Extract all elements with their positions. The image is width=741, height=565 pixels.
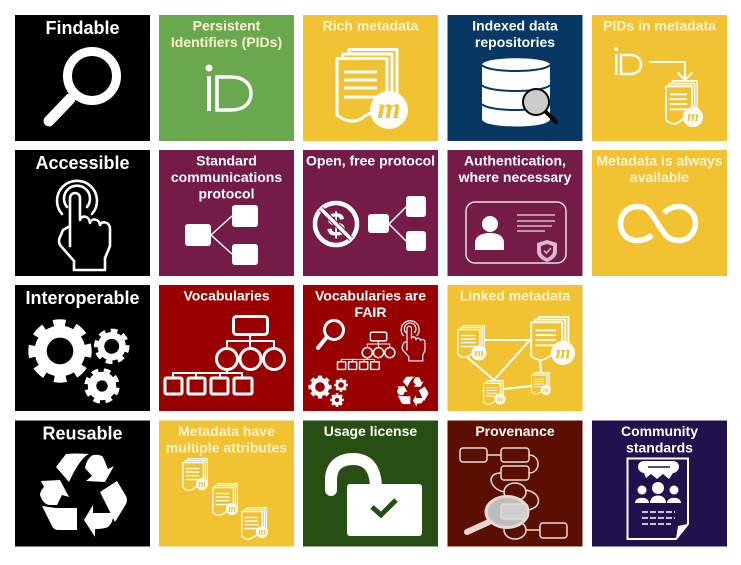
icon: small hand <box>401 321 425 361</box>
panel: Standard communications protocol <box>159 150 294 276</box>
heading: Rich metadata: Rich metadata <box>323 18 419 34</box>
icon: pointing hand <box>57 181 110 270</box>
heading: Standard communications protocol: protocol <box>198 186 254 202</box>
panel: Provenance <box>448 420 582 546</box>
heading: Metadata have multiple attributes: Metadata have <box>178 423 275 439</box>
panel: Reusable <box>15 420 150 546</box>
heading: Metadata have multiple attributes: multiple attributes <box>166 440 287 456</box>
icon: document 3: m <box>258 527 266 538</box>
icon: hierarchy tree <box>165 316 284 394</box>
heading: Persistent Identifiers (PIDs): Identifiers (PIDs) <box>171 34 282 50</box>
icon: document D: m <box>543 386 549 394</box>
icon: infinity <box>620 206 696 240</box>
panel: Vocabularies <box>159 285 294 411</box>
heading: Indexed data repositories: Indexed data <box>472 18 558 34</box>
icon: no dollar: $ <box>327 206 345 243</box>
heading: Reusable: Reusable <box>42 424 123 444</box>
heading: Linked metadata: Linked metadata <box>460 288 570 304</box>
icon: open padlock <box>331 459 422 536</box>
arrow: iD to document <box>650 62 692 80</box>
panel: Indexed data repositories <box>448 15 582 141</box>
heading: Accessible: Accessible <box>35 153 130 173</box>
panel: Authentication, where necessary <box>448 150 582 276</box>
icon: recycle <box>40 454 127 537</box>
icon: metadata document: m <box>377 92 401 125</box>
icon: document 1: m <box>198 479 206 490</box>
icon: small recycle <box>397 377 428 407</box>
heading: Authentication, where necessary: where necessary <box>458 169 572 185</box>
panel: Vocabularies are FAIR <box>303 285 438 411</box>
panel: Accessible <box>15 150 150 276</box>
heading: Usage license: Usage license <box>324 423 417 439</box>
panel: PIDs in metadata <box>592 15 727 141</box>
icon: magnifying glass <box>49 52 116 121</box>
panel: Usage license <box>303 420 438 546</box>
heading: Open, free protocol: Open, free protocol <box>306 152 435 168</box>
icon: magnifier over graph <box>467 496 528 532</box>
panel: Metadata is always available <box>592 150 727 276</box>
icon: document C: m <box>497 394 503 404</box>
heading: Vocabularies are FAIR: Vocabularies are <box>315 288 426 304</box>
heading: Community standards: Community <box>621 423 698 439</box>
heading: Vocabularies: Vocabularies <box>183 288 270 304</box>
heading: Indexed data repositories: repositories <box>475 34 555 50</box>
icon: document B: m <box>556 342 570 364</box>
panel: Linked metadata <box>448 285 582 411</box>
panel: Open, free protocol <box>303 150 438 276</box>
icon: small magnifier <box>318 320 344 348</box>
icon: metadata document small: m <box>687 109 699 125</box>
panel: Interoperable <box>15 285 150 411</box>
icon: network nodes <box>185 205 258 265</box>
links between documents <box>468 340 541 389</box>
heading: Findable: Findable <box>45 18 120 38</box>
heading: Persistent Identifiers (PIDs): Persistent <box>193 18 261 34</box>
icon: database with magnifier <box>482 58 556 126</box>
heading: Metadata is always available: Metadata is always <box>596 152 723 168</box>
icon: small gears <box>310 377 347 406</box>
panel: Rich metadata <box>303 15 438 141</box>
icon: iD <box>206 64 251 111</box>
heading: PIDs in metadata: PIDs in metadata <box>603 18 716 34</box>
icon: iD small <box>614 47 641 75</box>
heading: Authentication, where necessary: Authentication, <box>464 152 566 168</box>
icon: document A: m <box>474 346 484 360</box>
icon: provenance graph <box>460 448 567 539</box>
icon: network nodes <box>368 196 426 251</box>
panel: Community standards <box>592 420 727 546</box>
icon: identity card <box>466 202 566 263</box>
panel: Findable <box>15 15 150 141</box>
heading: Standard communications protocol: Standard <box>196 152 257 168</box>
icon: small tree <box>338 332 395 369</box>
heading: Vocabularies are FAIR: FAIR <box>355 304 386 320</box>
panel: Persistent Identifiers <box>159 15 294 141</box>
icon: gears <box>33 324 129 406</box>
heading: Interoperable: Interoperable <box>25 288 140 308</box>
heading: Provenance: Provenance <box>475 423 555 439</box>
heading: Community standards: standards <box>626 440 693 456</box>
heading: Metadata is always available: available <box>630 169 689 185</box>
heading: Standard communications protocol: communications <box>171 169 282 185</box>
icon: community document <box>628 458 688 539</box>
icon: document 2: m <box>228 504 236 515</box>
panel: Metadata have multiple attributes <box>159 420 294 546</box>
